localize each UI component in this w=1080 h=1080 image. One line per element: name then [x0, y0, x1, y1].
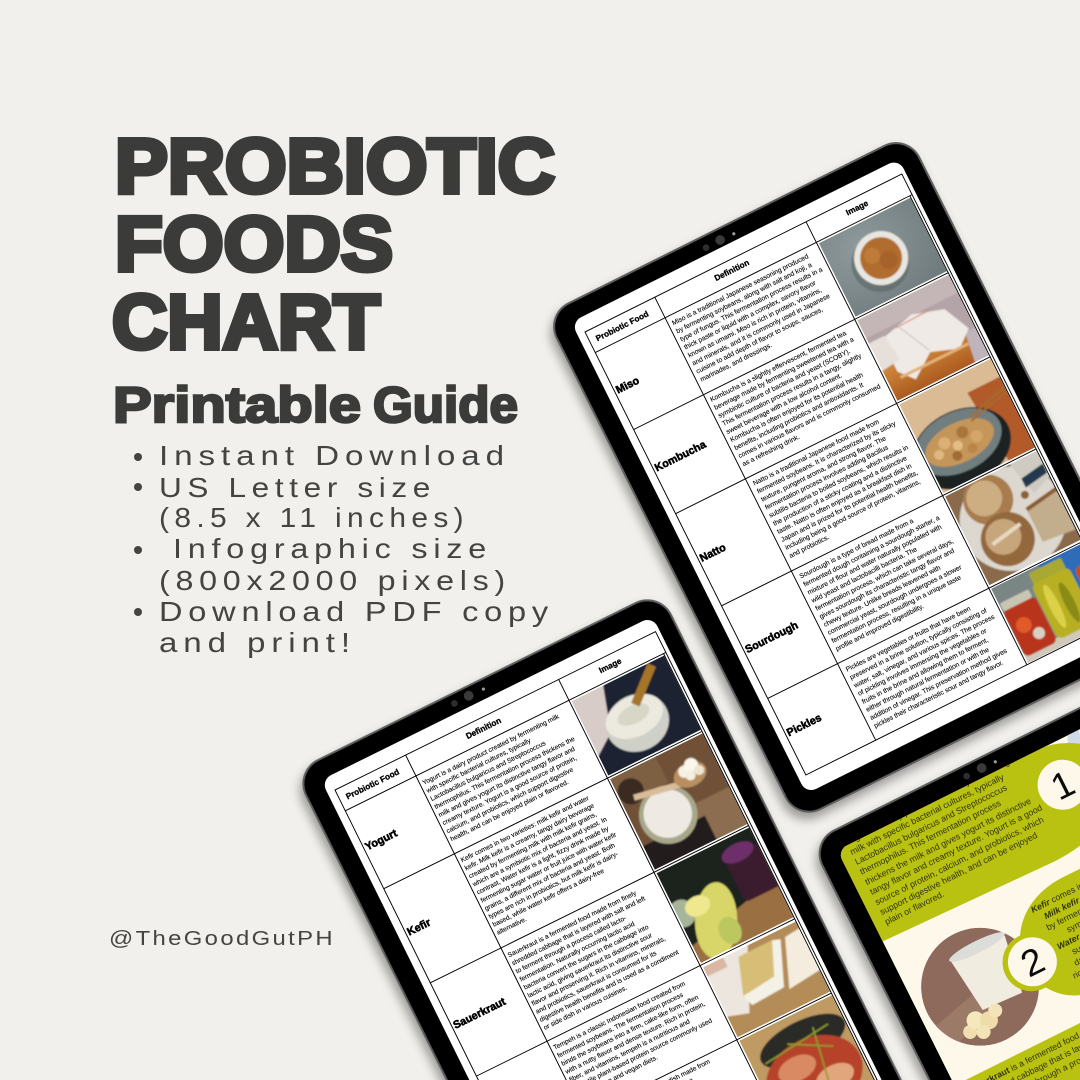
table header: Definition — [713, 258, 751, 283]
subtitle: Printable — [113, 377, 361, 433]
photo: sauerkraut — [656, 828, 794, 963]
table header: Probiotic Food — [594, 309, 650, 343]
definition: miso: known as umami. Miso is rich in protein, vitamins, — [687, 287, 823, 359]
definition: kefir: fermenting sugar water or fruit juice with water kefir — [480, 831, 619, 904]
definition: sourdough: gives sourdough its characteristic tangy flavor and — [819, 548, 956, 621]
band 1 text: thickens the milk and gives yogurt its distinctive — [863, 796, 1033, 887]
definition: kombucha: sweet beverage with a low alcohol content. — [725, 372, 843, 436]
definition: miso: type of fungus. This fermentation process results in a — [679, 266, 824, 343]
camera — [449, 684, 487, 709]
photo: tempeh — [703, 922, 830, 1038]
definition: kefir: which are a symbiotic mix of bacteria and yeast. In — [471, 816, 608, 889]
definition: natto: Natto is a traditional Japanese food made from — [752, 418, 881, 487]
feature list: Instant Download — [159, 440, 510, 471]
screen — [571, 159, 1080, 794]
feature list: Infographic size — [173, 533, 492, 564]
definition: kombucha: Kombucha is a slightly effervescent, fermented tea — [709, 330, 848, 404]
definition: pickles: of pickling involves immersing the vegetables or — [857, 627, 989, 698]
table grid — [585, 174, 1080, 775]
photo: kefir glass — [921, 928, 1039, 1046]
food names: Yogurt — [363, 827, 400, 853]
definition: tempeh: fermented soybeans. The fermentation process — [556, 991, 685, 1060]
definition: natto: including being a good source of protein, vitamins, — [784, 479, 922, 552]
band 2 text — [1031, 884, 1080, 979]
definition: tempeh: binds the soybeans into a firm, cake-like form, often — [560, 994, 700, 1068]
band 1 text: milk with specific bacterial cultures, typically — [848, 772, 1006, 857]
definition: yogurt: calcium, and probiotics, which support digestive — [445, 766, 575, 835]
definition: pickles: Pickles are vegetables or fruits that have been — [845, 605, 972, 674]
band 1 text — [850, 764, 1044, 926]
definition: kombucha: as a refreshing drink. — [741, 434, 801, 468]
band 1 text: tangy flavor and creamy texture. Yogurt is a good — [868, 802, 1044, 897]
definition: kefir: contrast, Water kefir is a light, fizzy drink made by — [476, 825, 611, 896]
band 1 text: support digestive health, and can be enjoyed — [878, 830, 1039, 917]
definition: sauerkraut: to ferment through a process called lacto- — [515, 915, 628, 975]
photo: kombucha — [858, 274, 989, 401]
definition: miso: marinades, and dressings. — [699, 342, 773, 384]
table header: Definition — [464, 716, 503, 741]
definition: pickles: pickles their characteristic sour and tangy flavor. — [873, 659, 1005, 730]
definition: miso: by fermenting soybeans, along with salt and koji, a — [675, 262, 813, 335]
definition: pickles: preserved in a brine solution, typically consisting of — [849, 607, 988, 682]
photo: miso — [819, 198, 947, 317]
definition: kefir: types are rich in probiotics, but milk kefir is dairy- — [488, 851, 619, 921]
tablet: bottom-left chart — [293, 590, 914, 1080]
band 1 text: source of protein, calcium, and probiotics, which — [873, 814, 1045, 907]
definition: kombucha: comes in various flavors and is commonly consumed — [737, 383, 882, 460]
definition: kefir: based, while water kefir offers a dairy-free — [492, 868, 606, 929]
tablet: top chart — [544, 133, 1080, 822]
definition: pickles: water, salt, vinegar, and various spices. The process — [852, 613, 997, 690]
definition: natto: fermentation process involves adding Bacillus — [764, 444, 890, 512]
feature list: US Letter size — [159, 472, 436, 503]
title — [112, 124, 555, 366]
title: PROBIOTIC — [115, 124, 555, 210]
definition: sauerkraut: bacteria convert the sugars in the cabbage into — [523, 924, 650, 992]
definition: natto: Japan and is prized for its potential health benefits, — [780, 470, 919, 544]
tablet body — [544, 133, 1080, 822]
photo: yogurt glass corner — [1068, 729, 1080, 744]
camera — [701, 228, 737, 253]
table grid — [335, 632, 877, 1080]
definition: yogurt: with specific bacterial cultures, typically — [425, 737, 533, 795]
food names — [614, 360, 842, 739]
definition: yogurt: thermophilus. This fermentation process thickens the — [434, 736, 576, 811]
table header — [594, 199, 871, 343]
table header: Image — [598, 656, 623, 675]
title: CHART — [112, 280, 380, 366]
green band 3 — [966, 1023, 1080, 1080]
subtitle: Guide — [373, 377, 518, 433]
definition: sourdough: profile and improved digestibility. — [835, 603, 925, 653]
photo: sourdough — [945, 451, 1080, 585]
table header: Probiotic Food — [345, 767, 401, 801]
definition: kefir: alternative. — [496, 916, 528, 937]
definition: yogurt: milk and gives yogurt its distinctive tangy flavor and — [437, 746, 577, 819]
food names: Kombucha — [653, 438, 709, 474]
green band 2 — [1020, 868, 1080, 996]
definition: pickles: either through natural fermentation or with the — [865, 646, 991, 714]
definition: natto: fermented soybeans. It is characterized by its sticky — [756, 420, 898, 495]
definition: sourdough: commercial yeast, sourdough undergoes a slower — [827, 564, 964, 637]
band 1 text: plain or flavored. — [883, 889, 946, 927]
handle: @TheGoodGutPH — [109, 928, 335, 950]
definition: sourdough: mixture of flour and water naturally populated with — [807, 524, 943, 597]
screen — [840, 729, 1080, 1080]
food names: Miso — [614, 375, 642, 396]
food names: Natto — [698, 541, 728, 565]
definition: sauerkraut: shredded cabbage that is layered with salt and left — [511, 895, 647, 967]
food names: Kefir — [405, 916, 434, 938]
food names: Sauerkraut — [451, 996, 508, 1032]
definition: yogurt: Yogurt is a dairy product created by fermenting milk — [422, 713, 561, 787]
definition: miso: cuisine to add depth of flavor to soups, sauces, — [695, 306, 824, 376]
photo: kefir — [610, 733, 748, 870]
definition: sourdough: fermentation process, resulting in a unique taste — [831, 574, 963, 645]
definition: kombucha: Kombucha is often enjoyed for its potential health — [729, 372, 865, 444]
definition: kefir: kefir. Milk kefir is a creamy, tangy dairy beverage — [464, 802, 596, 872]
feature list — [134, 440, 554, 658]
definition: sauerkraut: or side dish in various cuisines. — [543, 985, 628, 1032]
definition: sauerkraut: and probiotics, sauerkraut is consumed for its — [535, 950, 658, 1016]
definition: miso: Miso is a traditional Japanese seasoning produced — [671, 253, 810, 327]
definition: natto: taste. Natto is often enjoyed as a breakfast dish in — [776, 463, 913, 536]
definition: sauerkraut: flavor and preserving it. Rich in vitamins, minerals, — [531, 936, 667, 1008]
definition: natto: the production of a sticky coating and a distinctive — [772, 455, 908, 528]
tablet: infographic — [810, 706, 1080, 1080]
screen — [321, 616, 888, 1080]
definition: sourdough: wild yeast and lactobacilli bacteria. The — [810, 546, 919, 605]
food names: Pickles — [785, 712, 824, 739]
definition: tempeh: Tempeh is a classic Indonesian food created from — [552, 980, 687, 1052]
definition: sourdough: fermentation process, which can take several days, — [815, 538, 955, 613]
definition: kombucha: symbiotic culture of bacteria and yeast (SCOBY). — [717, 348, 852, 420]
definition: sourdough: chewy texture. Unlike breads leavened with — [823, 564, 942, 629]
definition: sauerkraut: fermentation. Naturally occurring lactic acid — [519, 921, 636, 983]
feature list: (800x2000 pixels) — [159, 565, 511, 596]
definition: sauerkraut: lactic acid, giving sauerkraut its distinctive sour — [527, 932, 654, 1000]
definition: pickles: addition of vinegar. This preservation method gives — [869, 647, 1009, 722]
feature list: and print! — [159, 627, 356, 658]
definition: kefir: created by fermenting milk with milk kefir grains, — [468, 811, 598, 880]
definition: natto: subtilis bacteria to boiled soybeans, which results in — [768, 444, 910, 520]
definition: kombucha: This fermentation process results in a tangy, slightly — [721, 352, 863, 428]
definition: sourdough: fermented dough containing a sourdough starter, a — [803, 515, 941, 589]
definition: sauerkraut: Sauerkraut is a fermented food made from finely — [507, 890, 638, 959]
feature list: Download PDF copy — [159, 596, 554, 627]
feature list: (8.5 x 11 inches) — [159, 502, 469, 533]
definition: sauerkraut: digestive health benefits and is used as a condiment — [539, 949, 680, 1024]
table header — [344, 656, 624, 801]
definition: kombucha: benefits, including probiotics and antioxidants. It — [733, 382, 865, 452]
definition: pickles: fruits in the brine and allowing them to ferment, — [861, 637, 990, 706]
photo: natto — [899, 358, 1035, 493]
definition: natto: texture, pungent aroma, and strong flavor. The — [760, 435, 888, 503]
photo: yogurt — [572, 656, 701, 776]
table header: Image — [845, 199, 870, 217]
photo: pickles — [991, 544, 1080, 663]
food names: Sourdough — [743, 620, 800, 656]
definition: kombucha: beverage made by fermenting sweetened tea with a — [713, 336, 855, 412]
tablet body — [293, 590, 914, 1080]
definition: yogurt: health, and can be enjoyed plain or flavored. — [449, 779, 570, 843]
band 1 text: thermophilus. This fermentation process — [858, 798, 1003, 877]
number 2 — [1002, 936, 1057, 992]
subtitle — [113, 377, 518, 433]
definition: natto: and probiotics. — [788, 534, 831, 560]
definition: miso: thick paste or liquid with a complex, savory flavor — [683, 279, 818, 351]
band 1 text: Yogurt is a dairy product created by fermenting — [843, 757, 1011, 847]
definition: miso: and minerals, and it is commonly used in Japanese — [691, 293, 832, 367]
definition: kefir: grains, a different mix of bacteria and yeast. Both — [484, 842, 617, 913]
definition: yogurt: Lactobacillus bulgaricus and Streptococcus — [430, 740, 548, 803]
definition: tempeh: with a nutty flavor and dense texture. Rich in protein, — [564, 1001, 707, 1076]
food names — [363, 817, 508, 1032]
definition: yogurt: creamy texture. Yogurt is a good source of protein, — [441, 755, 578, 827]
number 2: 2 — [1014, 939, 1051, 985]
photo: kimchi — [740, 995, 874, 1080]
band 1 text: Lactobacillus bulgaricus and Streptococcus — [853, 782, 1009, 867]
camera — [961, 756, 999, 781]
definition: kefir: Kefir comes in two varieties: milk kefir and water — [460, 795, 591, 864]
title: FOODS — [115, 202, 393, 288]
tablet body — [809, 660, 1080, 1080]
definition: sourdough: Sourdough is a type of bread made from a — [798, 518, 915, 580]
green band 1 — [840, 743, 1080, 942]
